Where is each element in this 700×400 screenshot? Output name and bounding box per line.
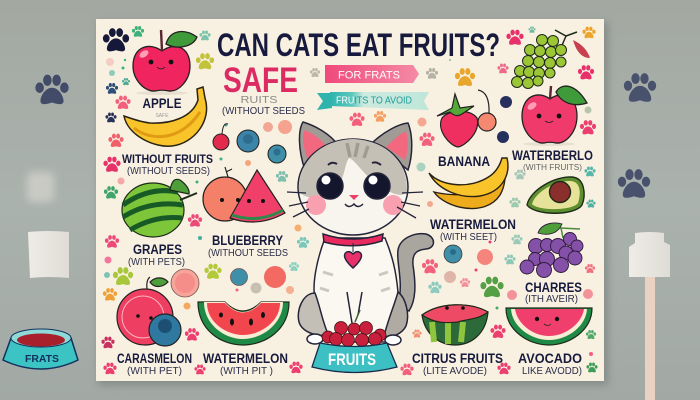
icon: fruit bowl: FRUITS <box>328 350 376 369</box>
cat haunches <box>298 292 408 345</box>
label: watermelon with seet: WATERMELON <box>430 217 516 232</box>
label: watermelon bottom: WATERMELON <box>203 351 288 366</box>
icon: purple grapes <box>520 223 583 278</box>
label: waterberlo <box>512 148 593 172</box>
icon: avocado <box>527 177 584 213</box>
banner: fruits to avoid <box>317 92 429 110</box>
icon: green grapes <box>512 30 590 88</box>
cat nose and mouth <box>345 195 363 206</box>
icon: fruit bowl <box>312 310 397 372</box>
cat collar and heart <box>323 234 383 268</box>
panel: poster <box>96 19 604 381</box>
label: charres <box>525 280 582 305</box>
cat body <box>314 238 398 342</box>
label: blueberry <box>208 233 288 259</box>
label: without fruits: (WITHOUT SEEDS) <box>127 165 210 177</box>
label: without fruits: WITHOUT FRUITS <box>122 152 213 166</box>
label: watermelon bottom <box>203 351 288 377</box>
banner: for frats: FOR FRATS <box>338 70 400 82</box>
label: carasmelon: (WITH PET) <box>127 365 182 377</box>
label: banana: BANANA <box>438 154 490 169</box>
label: carasmelon: CARASMELON <box>117 351 192 366</box>
icon: blueberry <box>444 245 462 263</box>
label: citrus fruits: CITRUS FRUITS <box>412 351 503 366</box>
icon: wall paw lower right <box>618 169 650 198</box>
icon: banana bunch <box>429 158 508 209</box>
icon: food bowl FRATS: FRATS <box>25 353 59 365</box>
illustration: cat <box>287 122 434 345</box>
icon: wall paw left <box>35 75 69 104</box>
label: waterberlo: WATERBERLO <box>512 148 593 163</box>
title: CAN CATS EAT FRUITS? <box>217 27 500 63</box>
text block: safe subtitle: RUITS <box>240 95 278 106</box>
icon: cherry and blueberries <box>213 124 286 163</box>
icon: round watermelon <box>122 179 197 237</box>
icon: apple right <box>522 86 587 146</box>
cat chest shading <box>320 272 390 291</box>
banner: fruits to avoid: FRUITS TO AVOID <box>336 96 412 106</box>
label: charres: CHARRES <box>525 280 582 295</box>
icon: food bowl FRATS <box>3 329 78 369</box>
icon: plum and blueberry <box>117 277 181 346</box>
label: apple: SAFE <box>155 113 169 119</box>
icon: strawberry and cherry <box>437 90 496 147</box>
icon: apple <box>133 30 197 95</box>
scattered paws and dots <box>101 26 598 375</box>
cat tail <box>398 234 434 311</box>
wall decor: left <box>27 75 69 278</box>
label: grapes: (WITH PETS) <box>128 256 185 268</box>
label: citrus fruits <box>412 351 503 377</box>
label: grapes: GRAPES <box>133 242 182 257</box>
icon: peach and watermelon slice <box>203 167 285 222</box>
cat eyes <box>317 173 390 199</box>
cat head <box>298 139 408 235</box>
cherries <box>322 310 386 346</box>
icon: watermelon bowl <box>422 305 488 345</box>
label: avocado: AVOCADO <box>518 351 582 366</box>
label: apple: APPLE <box>142 96 182 111</box>
wall decor: right <box>618 73 670 400</box>
icon: banana <box>124 87 207 146</box>
label: without fruits <box>122 152 213 177</box>
cat inner leg lines <box>347 292 362 323</box>
label: blueberry: (WITHOUT SEEDS <box>208 247 288 259</box>
blurred white wall holder <box>27 172 54 202</box>
label: waterberlo: (WITH FRUITS) <box>523 163 582 172</box>
text block: safe subtitle: (WITHOUT SEEDS <box>222 105 305 117</box>
heading: safe: SAFE <box>223 61 298 100</box>
icon: watermelon half with bite <box>198 302 289 345</box>
cat whiskers <box>287 192 423 218</box>
floor lamp pole <box>645 276 655 400</box>
label: watermelon with seet <box>430 217 516 243</box>
floor lamp cap <box>629 232 670 277</box>
poster shadow <box>98 22 608 385</box>
label: grapes <box>128 242 185 268</box>
text block: safe subtitle <box>222 95 305 117</box>
icon: grapefruit, blueberry and tomato <box>171 266 286 297</box>
label: charres: (ITH AVEIR) <box>525 293 578 305</box>
label: avocado: LIKE AVODD) <box>522 365 582 377</box>
label: blueberry: BLUEBERRY <box>212 233 283 248</box>
label: apple <box>142 96 182 119</box>
label: avocado <box>518 351 582 377</box>
cat cheeks <box>306 195 403 215</box>
banner: for frats <box>325 65 419 83</box>
icon: watermelon slice <box>506 308 592 345</box>
icon: wall paw upper right <box>624 73 656 102</box>
label: watermelon bottom: (WITH PIT ) <box>220 365 273 377</box>
cat brows <box>328 162 381 165</box>
label: carasmelon <box>117 351 192 377</box>
white wall cylinder left <box>28 231 69 278</box>
cat ears <box>299 122 412 170</box>
label: citrus fruits: (LITE AVODE) <box>423 365 487 377</box>
label: watermelon with seet: (WITH SEET) <box>440 231 497 243</box>
cat head patches <box>299 139 407 198</box>
